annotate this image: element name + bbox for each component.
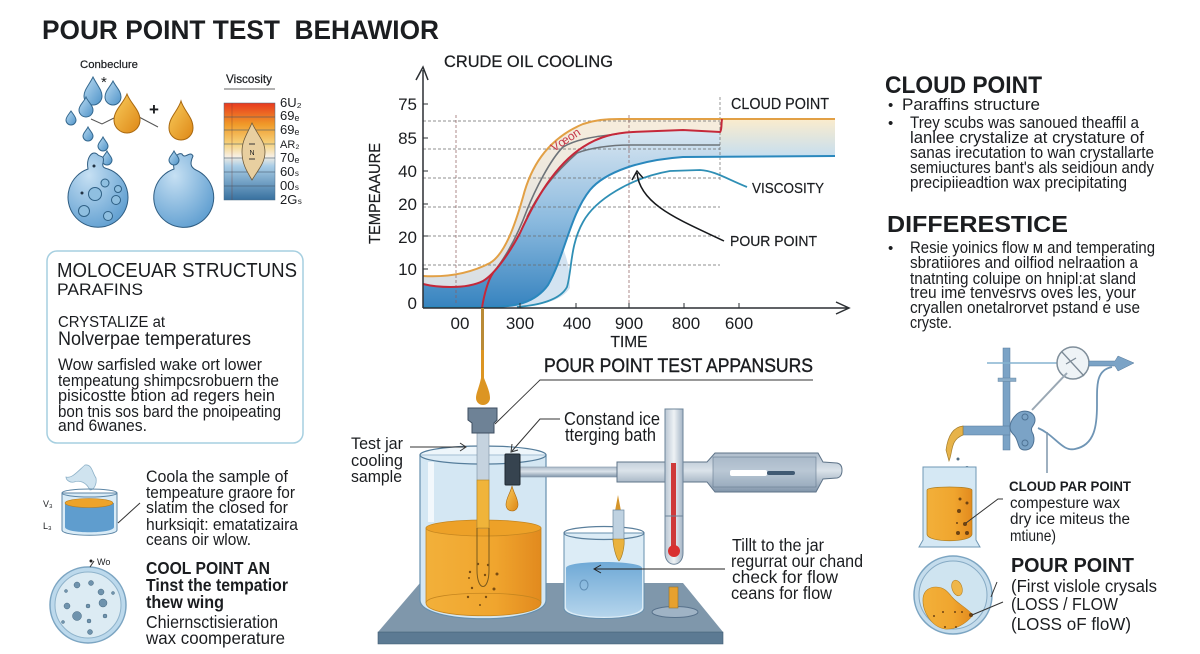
icon: small drop on sphere xyxy=(169,151,179,165)
label: test jar xyxy=(351,435,403,486)
dashed grid xyxy=(423,97,720,265)
icon: connector line xyxy=(91,117,158,127)
dish label: Wo xyxy=(97,557,110,567)
horizontal body xyxy=(617,453,842,492)
beaker wax specks xyxy=(956,498,969,535)
link xyxy=(1032,373,1067,410)
wax particles xyxy=(467,563,498,606)
label: tilt: regurrat our chand xyxy=(731,551,863,571)
dish small blob xyxy=(950,579,964,597)
sub bullet text: Paraffins structure xyxy=(902,95,1040,114)
body paragraph xyxy=(58,356,281,435)
x axis numbers: 00 xyxy=(451,314,469,333)
right band xyxy=(720,119,835,157)
drops xyxy=(956,458,970,484)
illustration: cooling cylinder: L₃ xyxy=(43,521,52,531)
scale labels: 69ₑ xyxy=(280,108,299,123)
test tube xyxy=(477,433,489,528)
arrow: pour point xyxy=(632,171,724,241)
hand/cloth xyxy=(66,465,96,490)
dish xyxy=(50,567,126,643)
panel: viscosity scale xyxy=(224,72,302,207)
pour point body xyxy=(1011,576,1157,634)
fill: lower white band xyxy=(490,157,720,308)
arrow: tilt xyxy=(594,565,725,573)
y axis numbers: 20 xyxy=(398,195,417,214)
body paragraph: bon tnis sos bard the pnoipeating xyxy=(58,403,281,421)
color bar xyxy=(224,103,275,200)
crystalize text: CRYSTALIZE at xyxy=(58,314,166,331)
scale labels: 69ₑ xyxy=(280,122,299,137)
beaker oil xyxy=(927,487,972,541)
heading: viscosity: Viscosity xyxy=(226,72,272,86)
panel: molecular structure xyxy=(47,251,303,443)
small stand xyxy=(652,587,698,618)
big jar glass xyxy=(420,455,546,619)
label: pour point: POUR POINT xyxy=(730,233,817,250)
arrow xyxy=(966,499,1003,523)
body lines: sanas irecutation to wan crystallarte xyxy=(910,144,1154,162)
panel: viscosity scale: N xyxy=(249,150,255,157)
scale labels: AR₂ xyxy=(280,139,300,151)
cloud par point body: compesture wax xyxy=(1010,495,1120,512)
dish xyxy=(914,556,992,634)
label: tilt: Tillt to the jar xyxy=(732,535,824,555)
icon: asterisk: * xyxy=(101,74,107,91)
gauge xyxy=(1057,347,1089,379)
y axis numbers xyxy=(398,95,417,313)
text: cool point: thew wing xyxy=(146,592,224,612)
thermometer xyxy=(665,409,683,564)
heading: DIFFERESTICE xyxy=(887,211,1068,237)
apparatus title leader xyxy=(495,380,813,424)
small probe xyxy=(613,495,624,561)
icon: blue droplets xyxy=(66,77,121,165)
text: cool point: Chiernsctisieration xyxy=(146,612,278,632)
body lines: Trey scubs was sanoued theaffil a xyxy=(910,114,1140,132)
chart title: CRUDE OIL COOLING xyxy=(444,52,613,71)
dashed verticals xyxy=(456,115,629,305)
y axis numbers: 40 xyxy=(398,162,417,181)
panel heading: MOLOCEUAR STRUCTUNS xyxy=(57,260,297,282)
body paragraph: Wow sarfisled wake ort lower xyxy=(58,356,262,374)
y axis numbers: 20 xyxy=(398,228,417,247)
body paragraph: pisicostte btion ad regers hein xyxy=(58,387,275,405)
illustration: cooling cylinder xyxy=(43,465,140,535)
crystals xyxy=(62,580,114,634)
body lines xyxy=(910,114,1155,192)
pour point body: (First vislole crysals xyxy=(1011,576,1157,596)
divider xyxy=(224,88,275,90)
clamp xyxy=(505,454,520,485)
body bullet: • xyxy=(888,115,893,132)
pour point heading: POUR POINT xyxy=(1011,555,1134,577)
text: cooling steps: slatim the closed for xyxy=(146,498,288,517)
body lines: treu ime tenvesrvs oves les, your xyxy=(910,284,1136,302)
x axis numbers: 400 xyxy=(563,314,591,333)
icon: plus: + xyxy=(149,100,159,119)
x axis title: TIME xyxy=(610,334,648,351)
cloud par point heading: CLOUD PAR POINT xyxy=(1009,479,1132,494)
body lines: cryallen onetalrorvet pstand e use xyxy=(910,299,1140,317)
icon: orange droplet xyxy=(114,94,140,133)
cloud par point body xyxy=(1010,495,1130,545)
jar highlight xyxy=(428,462,434,522)
y axis numbers: 85 xyxy=(398,129,417,148)
label: tilt: check for flow xyxy=(732,567,838,587)
stand rod xyxy=(1003,348,1010,450)
label: viscosity: VISCOSITY xyxy=(752,180,824,197)
icon: plain sphere xyxy=(154,154,214,227)
tube oil column xyxy=(477,480,489,528)
arrow pipe xyxy=(1089,356,1134,371)
curve: grey lower xyxy=(527,145,720,217)
y axis numbers: 75 xyxy=(398,95,417,114)
body paragraph: and 6wanes. xyxy=(58,417,147,435)
small jar xyxy=(564,526,644,618)
illustration: right apparatus xyxy=(914,347,1157,634)
x axis numbers xyxy=(451,314,753,333)
body lines xyxy=(910,239,1155,332)
sub bullet: • xyxy=(888,97,893,114)
label: droplets heading: Conbeclure xyxy=(80,59,138,71)
body lines: semiuctures bant's als seidioun andy xyxy=(910,159,1155,177)
dish oil blob xyxy=(923,587,973,629)
arrow: test jar xyxy=(410,443,466,451)
text: cool point: COOL POINT AN xyxy=(146,558,270,578)
dish specks xyxy=(933,611,973,628)
blue liquid xyxy=(65,503,114,532)
knob xyxy=(1010,411,1035,450)
right column: cloud point xyxy=(885,72,1155,192)
x axis numbers: 800 xyxy=(672,314,700,333)
pour point body: (LOSS oF floW) xyxy=(1011,614,1131,634)
jar oil xyxy=(426,528,541,616)
curve: grey upper xyxy=(493,134,617,273)
label: constand ice: Constand ice xyxy=(564,409,660,429)
falling oil xyxy=(476,308,490,405)
scale labels: 2Gₛ xyxy=(280,192,302,207)
body lines: Resie yoinics flow ᴍ and temperating xyxy=(910,239,1155,257)
heading: CLOUD POINT xyxy=(885,72,1042,99)
y axis numbers: 10 xyxy=(398,260,417,279)
beaker xyxy=(919,467,980,547)
illustration: pour point test apparatus xyxy=(351,308,863,644)
oil layer xyxy=(65,498,113,508)
text: cooling steps: tempeature graore for xyxy=(146,483,295,502)
curve label: Vœon xyxy=(548,125,583,155)
right column: difference xyxy=(887,211,1155,332)
label: tilt: ceans for flow xyxy=(731,583,832,603)
ticks xyxy=(423,104,739,308)
jar rim xyxy=(420,446,546,464)
scale labels: 70ₑ xyxy=(280,150,299,165)
fill: lower light patch xyxy=(500,248,570,307)
y axis numbers: 0 xyxy=(408,294,417,313)
y axis title: TEMPEAAURE xyxy=(367,143,384,244)
x axis numbers: 300 xyxy=(506,314,534,333)
curve: red riser xyxy=(482,273,493,308)
body lines: precipiieadtion wax precipitating xyxy=(910,174,1127,192)
apparatus title: POUR POINT TEST APPANSURS xyxy=(544,356,813,377)
body lines: tnatnting coluipe on hnipl:at sland xyxy=(910,270,1136,288)
text: cooling steps xyxy=(146,467,299,549)
text: cooling steps: hurksiqit: ematatizaira xyxy=(146,515,299,534)
curve: red xyxy=(423,119,722,287)
label: tilt xyxy=(731,535,863,603)
panel subheading: PARAFINS xyxy=(57,281,143,299)
lens marker xyxy=(242,123,265,180)
tube lower section xyxy=(477,528,489,586)
pointer xyxy=(972,582,1003,615)
icon: sphere with bubbles xyxy=(68,153,128,227)
body paragraph: tempeatung shimpcsrobuern the xyxy=(58,372,279,390)
thermometer arm rod xyxy=(520,467,617,477)
scale labels: 00ₛ xyxy=(280,178,299,193)
bullet: • xyxy=(888,240,893,257)
text: cooling steps: ceans oir wlow. xyxy=(146,530,251,549)
glass xyxy=(62,493,117,535)
clamp drop xyxy=(506,486,518,511)
fill: orange band xyxy=(423,119,720,308)
scale labels: 60ₛ xyxy=(280,164,299,179)
text: cool point: Tinst the tempatior xyxy=(146,575,288,595)
x axis numbers: 600 xyxy=(725,314,753,333)
title: POUR POINT TEST BEHAWIOR xyxy=(42,15,439,45)
arrow xyxy=(118,503,140,523)
pipe xyxy=(963,426,1010,435)
body lines: cryste. xyxy=(910,314,952,332)
funnel cap xyxy=(468,408,497,433)
curve: viscosity xyxy=(517,170,747,307)
cloud par point body: dry ice miteus the xyxy=(1010,511,1130,528)
side labels: V₃ xyxy=(43,499,53,509)
pour point body: (LOSS / FLOW xyxy=(1011,594,1118,614)
text: cool point: wax coomperature xyxy=(145,628,285,648)
label: test jar: Test jar xyxy=(351,435,403,453)
cloud par point body: mtiune) xyxy=(1010,528,1056,545)
axes xyxy=(416,67,849,314)
panel box xyxy=(47,251,303,443)
curve: orange xyxy=(423,119,835,276)
curve: blue xyxy=(423,156,835,307)
base plate xyxy=(378,583,723,644)
text: cooling steps: Coola the sample of xyxy=(146,467,288,486)
label: constand ice xyxy=(564,409,660,445)
scale labels xyxy=(280,95,302,207)
label: test jar: cooling xyxy=(351,452,403,470)
panel: droplets illustration xyxy=(66,59,214,227)
scale labels: 6U₂ xyxy=(280,95,302,110)
label: test jar: sample xyxy=(351,468,402,486)
label: constand ice: tterging bath xyxy=(565,425,656,445)
arrow: constand ice xyxy=(511,419,560,452)
label: cloud point: CLOUD POINT xyxy=(731,96,829,113)
temperatures text: Nolverpae temperatures xyxy=(58,329,251,350)
body window xyxy=(713,457,816,487)
fill: blue band xyxy=(423,130,720,308)
icon: second orange droplet xyxy=(169,101,193,140)
chart: crude oil cooling xyxy=(367,52,849,351)
text: cool point xyxy=(145,558,288,648)
spout xyxy=(946,426,963,461)
body lines: sbratiiores and oilfiod nelraation a xyxy=(910,254,1139,272)
x axis numbers: 900 xyxy=(615,314,643,333)
body lines: lanlee crystalize at crystature of xyxy=(910,129,1144,147)
thin cross rod xyxy=(987,362,1057,364)
illustration: petri dish with crystals xyxy=(50,557,126,643)
base plate front edge xyxy=(378,632,723,644)
pointer xyxy=(90,561,94,567)
hose xyxy=(1038,367,1112,449)
